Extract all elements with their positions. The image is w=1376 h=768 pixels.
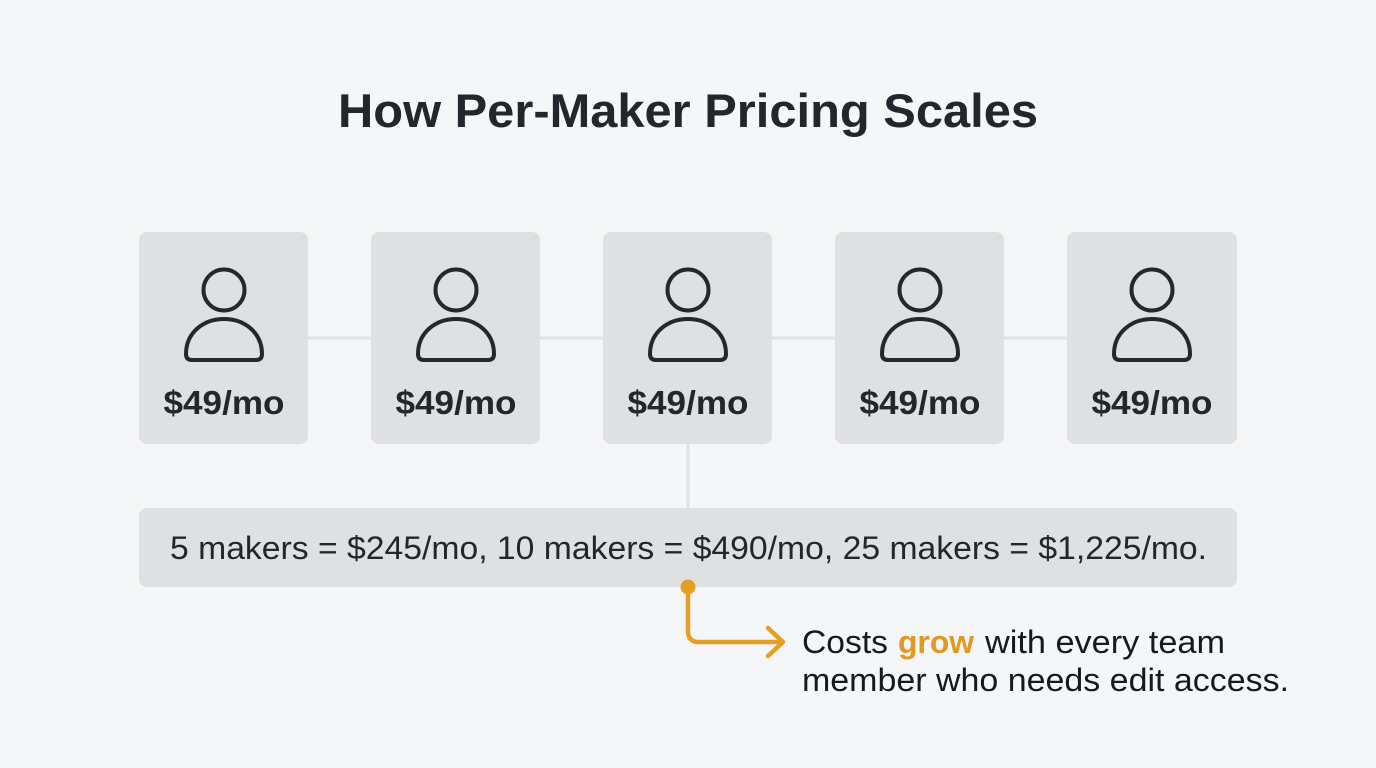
connectors between cards (308, 338, 1068, 508)
callout text: with every team (984, 624, 1225, 660)
card 2 (371, 232, 540, 444)
callout text: Costs (802, 624, 888, 660)
card 2: $49/mo (396, 384, 516, 421)
card 1 (139, 232, 308, 444)
callout text: grow (898, 624, 974, 660)
title: How Per-Maker Pricing Scales (338, 84, 1038, 137)
card 4: $49/mo (860, 384, 980, 421)
summary bar: 5 makers = $245/mo, 10 makers = $490/mo, 25 makers = $1,225/mo. (170, 530, 1207, 566)
callout text (802, 624, 1289, 698)
callout text: member who needs edit access. (802, 662, 1289, 698)
card 4 (835, 232, 1004, 444)
card 1: $49/mo (164, 384, 284, 421)
summary bar (139, 508, 1237, 587)
card 5: $49/mo (1092, 384, 1212, 421)
card 3: $49/mo (628, 384, 748, 421)
arrow callout connector (680, 580, 783, 656)
card 5 (1067, 232, 1237, 444)
card 3 (603, 232, 772, 444)
